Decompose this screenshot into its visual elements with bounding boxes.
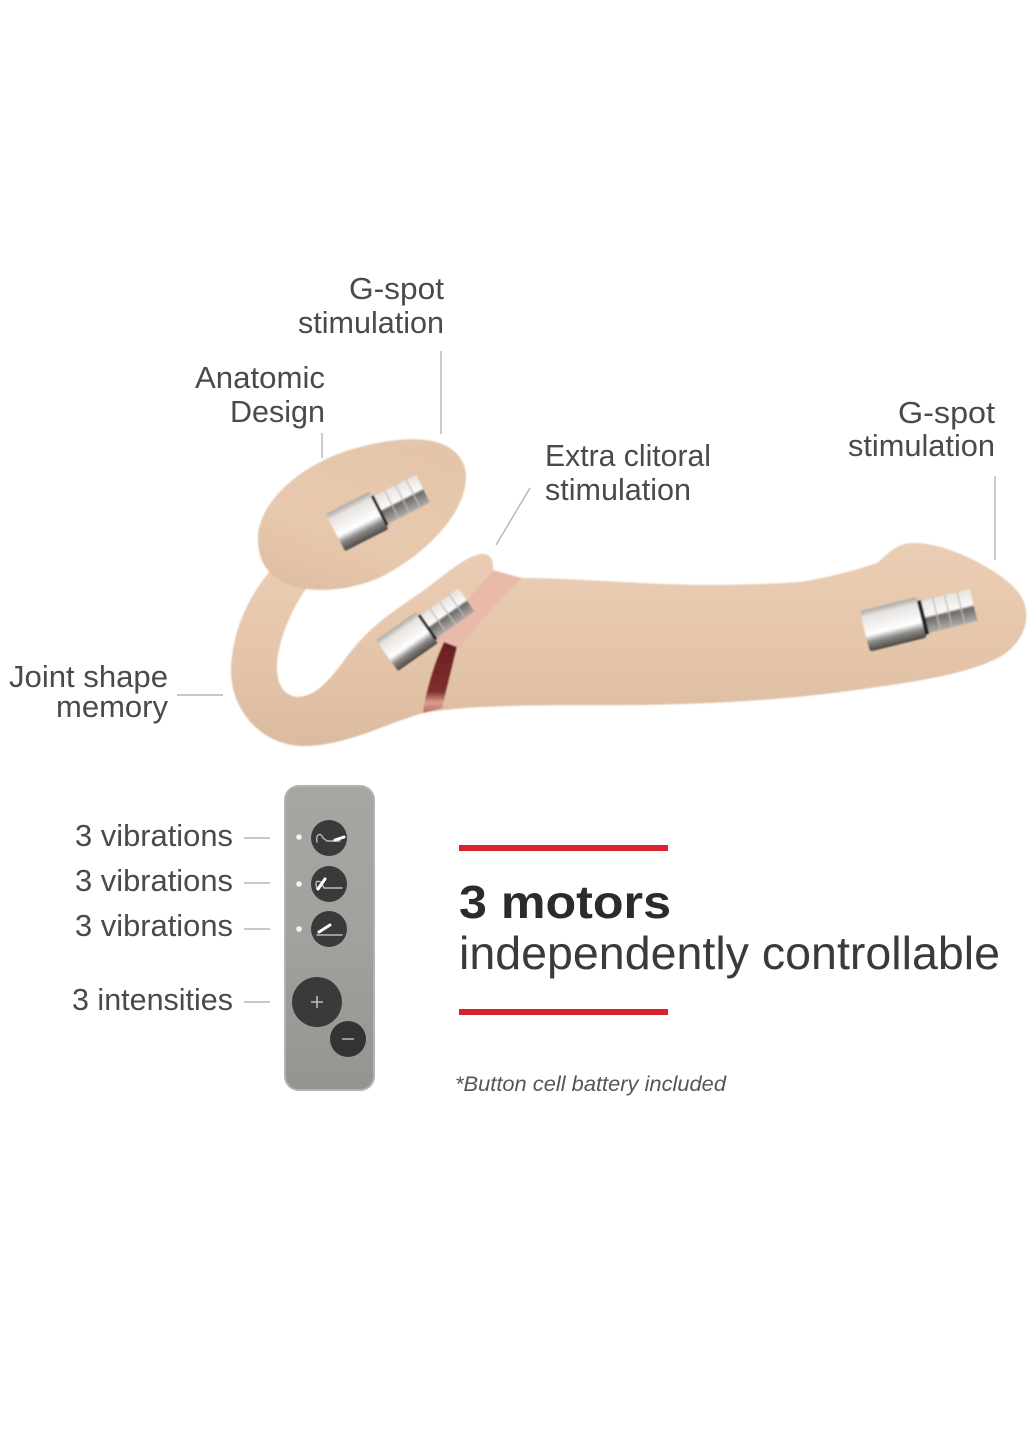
indicator lights (296, 834, 302, 932)
label: Anatomic Design: Design (230, 395, 325, 429)
headline (459, 876, 1000, 979)
product body (231, 543, 1026, 746)
motor: clitoral (376, 584, 477, 671)
product illustration (231, 439, 1026, 746)
motor: shaft (860, 584, 979, 652)
label: G-spot stimulation (right): stimulation (848, 429, 995, 463)
label: Joint shape memory: memory (56, 690, 169, 724)
label: Anatomic Design (195, 361, 325, 429)
red rule top (459, 845, 668, 851)
label: G-spot stimulation (top): G-spot (349, 272, 445, 306)
remote labels: 3 vibrations (75, 864, 233, 898)
red rule bottom (459, 1009, 668, 1015)
mode buttons (311, 820, 347, 947)
label: Joint shape memory (9, 660, 169, 724)
label: G-spot stimulation (right) (848, 396, 996, 463)
remote labels: 3 vibrations (75, 819, 233, 853)
remote control (285, 786, 374, 1090)
button glyphs (316, 835, 344, 935)
label: G-spot stimulation (top): stimulation (298, 306, 444, 340)
label: Extra clitoral stimulation: stimulation (545, 473, 691, 507)
label: Anatomic Design: Anatomic (195, 361, 325, 395)
label: Joint shape memory: Joint shape (9, 660, 168, 694)
label: G-spot stimulation (top) (298, 272, 445, 340)
bulb (258, 439, 466, 590)
label: Extra clitoral stimulation (545, 439, 711, 507)
remote labels: 3 intensities (72, 983, 233, 1017)
remote labels: 3 vibrations (75, 909, 233, 943)
plus button (292, 977, 342, 1027)
leader lines (177, 351, 995, 1002)
headline: 3 motors (459, 876, 671, 928)
minus button (330, 1021, 366, 1057)
rose gold band (423, 571, 522, 713)
motor: bulb (326, 469, 432, 551)
label: G-spot stimulation (right): G-spot (898, 396, 996, 430)
label: Extra clitoral stimulation: Extra clitoral (545, 439, 711, 473)
footnote: *Button cell battery included (455, 1073, 727, 1096)
headline: independently controllable (459, 927, 1000, 979)
remote labels (72, 819, 233, 1017)
